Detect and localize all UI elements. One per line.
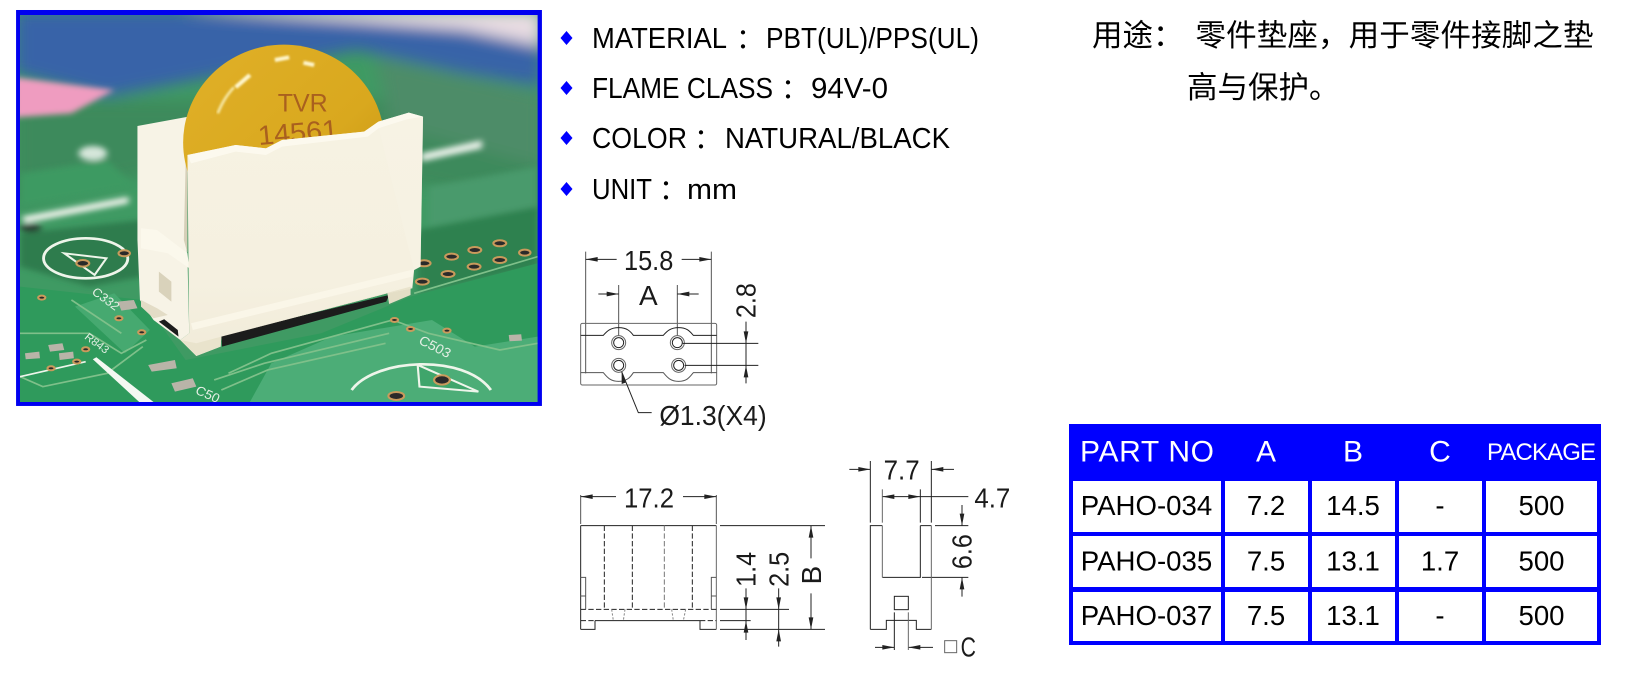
table values: PAHO-035	[1081, 546, 1212, 576]
usage description	[1092, 19, 1594, 105]
drawing: top view: 15.8	[624, 245, 673, 276]
yellow disc	[183, 44, 382, 172]
product photo: C503	[416, 332, 454, 361]
table values: 1.7	[1421, 546, 1459, 576]
drawing: top view: Ø1.3(X4)	[659, 400, 767, 431]
flame class line	[560, 73, 888, 105]
color line: NATURAL/BLACK	[725, 123, 951, 155]
table cells	[1073, 481, 1597, 641]
holder rear wall	[137, 117, 189, 340]
color line: COLOR	[592, 123, 687, 155]
table header: PART NO	[1080, 436, 1214, 468]
table values: 500	[1518, 490, 1565, 521]
drawing: top view: A	[639, 280, 658, 311]
drawing: top view	[581, 245, 767, 431]
spec list	[560, 23, 979, 206]
pcb lower area	[20, 263, 538, 402]
yellow disc: TVR	[278, 90, 328, 117]
color line	[560, 123, 951, 155]
parts table	[1069, 424, 1601, 645]
drawing: side view: C	[961, 632, 976, 663]
table values: 7.2	[1247, 490, 1285, 521]
product photo: C50	[193, 383, 222, 406]
material line: MATERIAL	[592, 23, 727, 55]
drawing: side view	[849, 454, 1010, 663]
table header: B	[1343, 436, 1363, 468]
drawing: front view: 17.2	[624, 482, 674, 513]
unit line: UNIT	[592, 174, 652, 206]
drawing: side view: 4.7	[974, 482, 1010, 513]
material line: PBT(UL)/PPS(UL)	[766, 23, 979, 55]
table header: PACKAGE	[1487, 439, 1596, 466]
drawing: side view: 6.6	[946, 534, 977, 569]
table values: 500	[1518, 546, 1565, 576]
table values: -	[1435, 490, 1445, 521]
table values: 7.5	[1247, 546, 1285, 576]
color line: ：	[694, 123, 722, 154]
unit line: ：	[659, 174, 687, 205]
unit line	[560, 174, 737, 206]
table header	[1080, 436, 1596, 468]
table header: A	[1256, 436, 1276, 468]
flame class line: ：	[781, 73, 809, 104]
table values: 7.5	[1247, 600, 1285, 631]
material line	[560, 23, 979, 55]
drawing: front view: B	[796, 566, 827, 584]
yellow disc: 14561	[256, 113, 339, 151]
unit line: mm	[687, 174, 737, 206]
table values: -	[1435, 600, 1445, 631]
flame class line: FLAME CLASS	[592, 73, 773, 105]
table values	[1081, 490, 1565, 631]
table values: 14.5	[1326, 490, 1380, 521]
drawing: front view	[581, 482, 827, 647]
drawing: side view: 7.7	[884, 454, 920, 485]
product photo: R843	[82, 331, 111, 356]
table values: 13.1	[1326, 546, 1380, 576]
product photo	[14, 10, 543, 406]
holder front wall	[159, 113, 423, 356]
table values: 13.1	[1326, 600, 1380, 631]
drawing: front view: 1.4	[731, 552, 762, 587]
table header: C	[1429, 436, 1451, 468]
product photo: C332	[89, 285, 122, 313]
flame class line: 94V-0	[811, 73, 888, 105]
drawing: front view: 2.5	[764, 552, 795, 587]
table values: PAHO-037	[1081, 600, 1212, 631]
table values: 500	[1518, 600, 1565, 631]
usage description: 零件垫座，用于零件接脚之垫	[1196, 19, 1594, 53]
material line: ：	[736, 23, 764, 54]
drawing: top view: 2.8	[731, 283, 762, 318]
table values: PAHO-034	[1081, 490, 1212, 521]
usage description: 用途：	[1092, 19, 1184, 53]
usage description: 高与保护。	[1187, 71, 1340, 105]
